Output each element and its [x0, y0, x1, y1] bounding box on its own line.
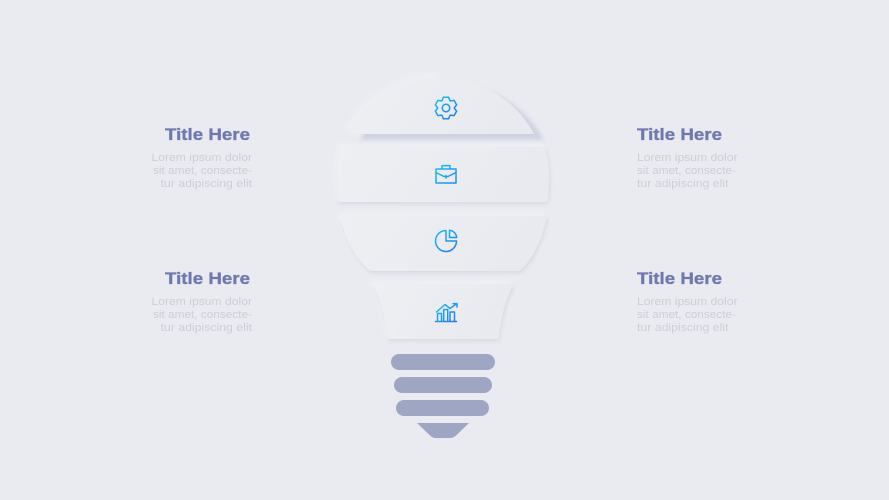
base bar 2	[394, 377, 492, 393]
text block: bottom left	[152, 269, 252, 334]
text block: bottom right: tur adipiscing elit	[637, 322, 728, 334]
text block: top right: sit amet, consecte-	[637, 165, 736, 177]
text block: bottom right: Lorem ipsum dolor	[637, 296, 738, 308]
text block: bottom right: Title Here	[637, 269, 722, 288]
segment 2: bulb upper body with briefcase icon	[337, 147, 549, 202]
light bulb	[337, 76, 549, 438]
text block: bottom right	[637, 269, 738, 334]
text block: top left	[152, 125, 252, 190]
icon: gear	[435, 97, 457, 119]
text block: bottom left: Lorem ipsum dolor	[152, 296, 252, 308]
text block: bottom left: sit amet, consecte-	[153, 309, 252, 321]
text block: top right: tur adipiscing elit	[637, 178, 728, 190]
text block: bottom left: Title Here	[165, 269, 250, 288]
text block: top right	[637, 125, 738, 190]
text block: top left: tur adipiscing elit	[160, 178, 252, 190]
segment 4: bulb lower neck with growth chart icon	[373, 284, 514, 339]
text block: top left: sit amet, consecte-	[153, 165, 252, 177]
text block: top left: Title Here	[165, 125, 250, 144]
icon: growth chart	[436, 304, 457, 322]
screw base	[391, 354, 495, 438]
base bar 1	[391, 354, 495, 370]
text block: bottom right: sit amet, consecte-	[637, 309, 736, 321]
icon: briefcase	[436, 166, 456, 183]
text block: top right: Lorem ipsum dolor	[637, 152, 738, 164]
base tip	[417, 423, 469, 438]
text block: top right: Title Here	[637, 125, 722, 144]
icon: pie chart	[436, 230, 457, 252]
segment 1: bulb top with gear icon	[348, 76, 544, 140]
text block: bottom left: tur adipiscing elit	[160, 322, 252, 334]
base bar 3	[396, 400, 489, 416]
text block: top left: Lorem ipsum dolor	[152, 152, 252, 164]
segment 3: bulb neck with pie chart icon	[340, 216, 547, 271]
